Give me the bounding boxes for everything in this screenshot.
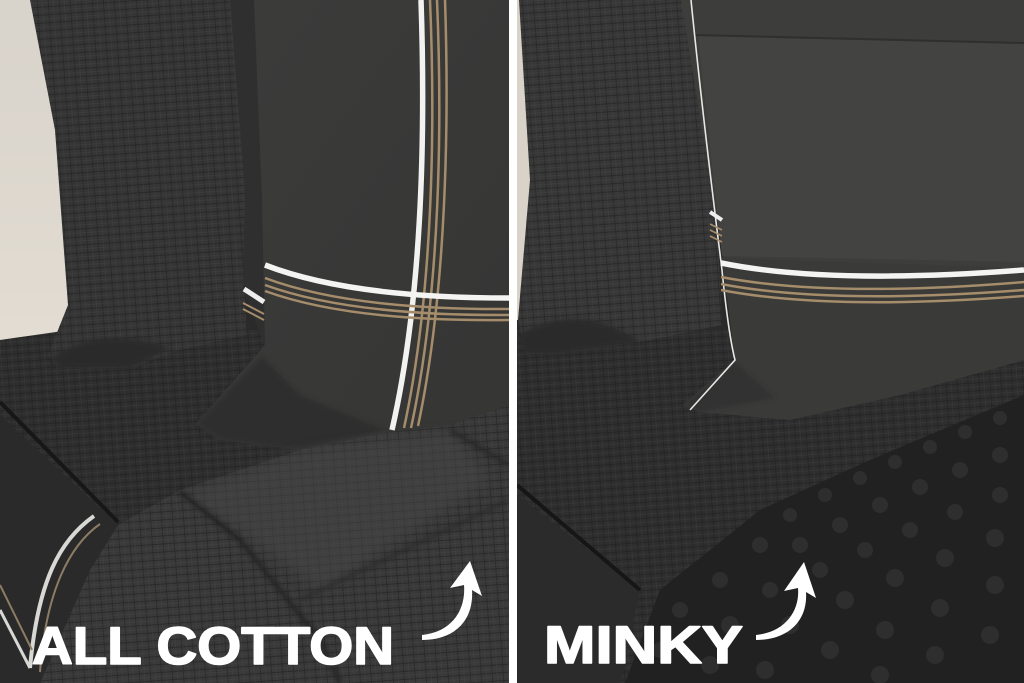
folded comforter [40,405,509,683]
right curved arrow [756,562,816,640]
dark backdrop [244,186,259,330]
front pillow horizontal stripes [243,265,509,320]
front pillow vertical stripes [392,0,447,430]
wall sliver [517,0,531,320]
back pillow [30,0,246,368]
front pillow [681,0,1024,420]
wall background [0,0,68,340]
left panel caption: ALL COTTON [32,617,394,676]
minky blanket [625,395,1024,683]
mattress sheet surface [0,330,294,522]
dark backdrop [517,218,732,330]
mattress sheet surface [517,330,1024,683]
side panel with zipper [517,495,640,683]
left curved arrow [422,561,482,640]
back pillow [518,0,722,354]
side zipper panel [0,415,118,683]
panel: all cotton bedding photo [0,0,509,683]
panel: minky bedding photo [517,0,1024,683]
pillow piping [690,0,735,410]
side panel stripes [0,516,100,672]
front pillow [196,0,509,450]
right panel caption: MINKY [544,616,743,675]
front pillow stripes [710,212,1024,302]
